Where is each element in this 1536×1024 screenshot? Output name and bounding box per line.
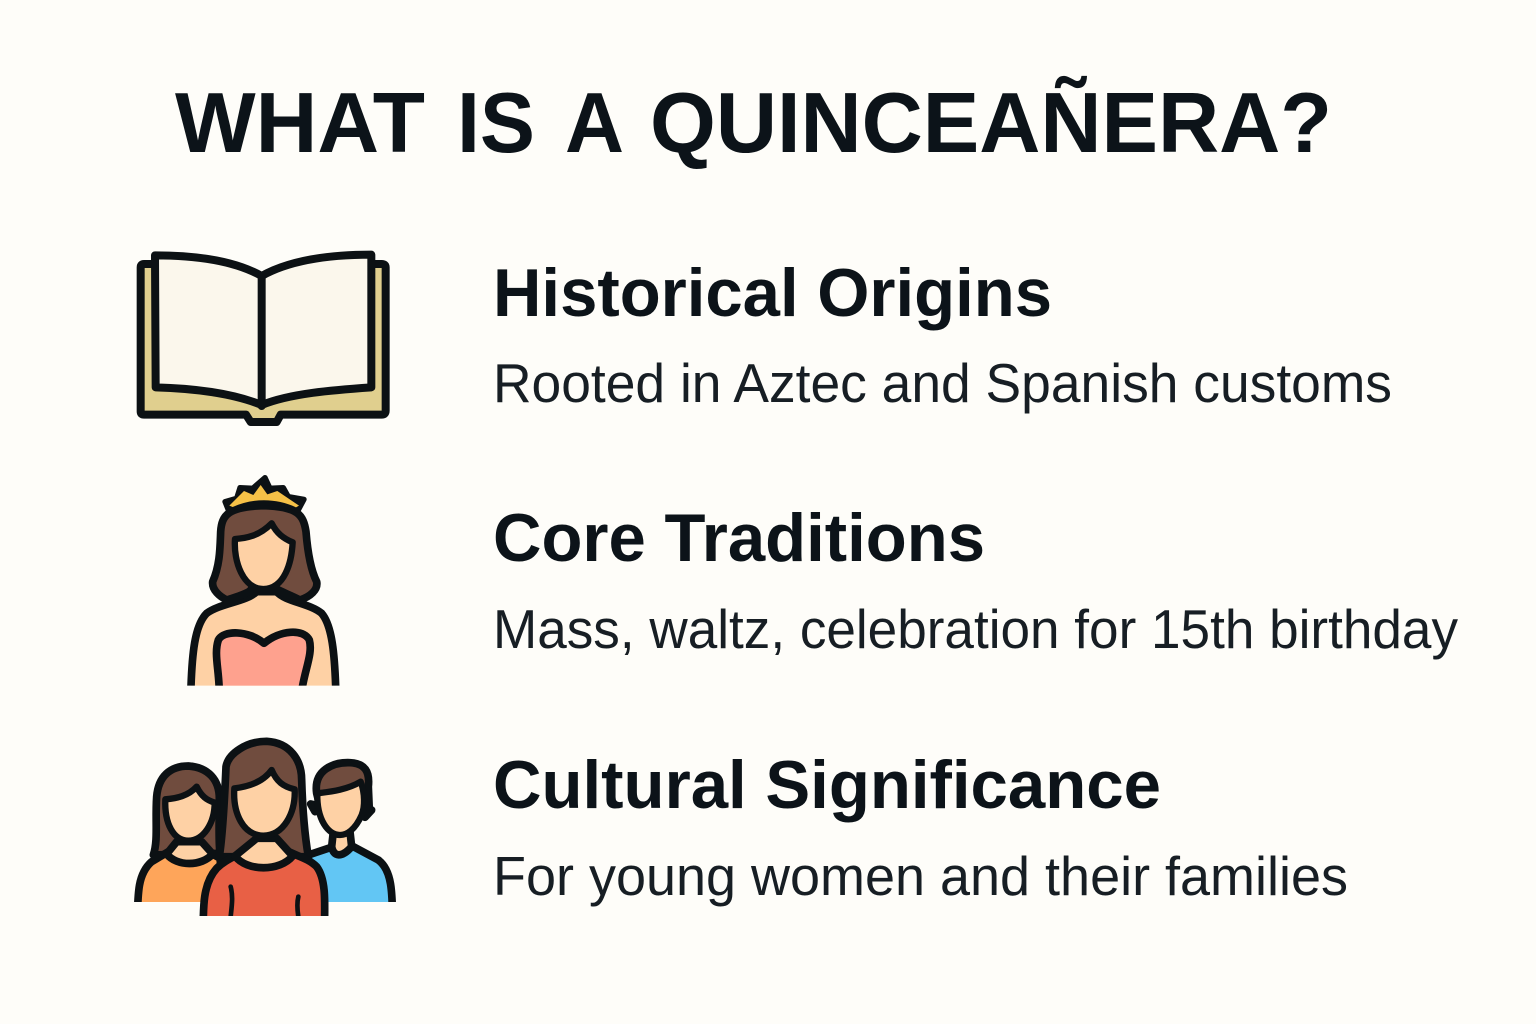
heading: core traditions: Core Traditions: [493, 500, 985, 576]
left figure: [134, 762, 222, 902]
icon: family group: [137, 741, 393, 943]
title: A: [565, 76, 623, 171]
row: historical origins: [141, 255, 1392, 422]
title: QUINCEAÑERA?: [650, 75, 1332, 171]
center figure: [203, 741, 325, 943]
title: IS: [457, 76, 535, 171]
icon: open book: [141, 255, 386, 422]
description: historical origins: Rooted in Aztec and Spanish customs: [493, 352, 1392, 414]
heading: cultural significance: Cultural Significance: [493, 747, 1161, 823]
row: cultural significance: [134, 738, 1346, 916]
row: core traditions: [191, 478, 1458, 698]
right figure: [308, 763, 393, 930]
description: cultural significance: For young women and their families: [493, 845, 1348, 907]
title: WHAT: [175, 76, 425, 171]
icon: quinceañera with crown: [191, 478, 336, 698]
description: core traditions: Mass, waltz, celebration for 15th birthday: [493, 598, 1458, 660]
heading: historical origins: Historical Origins: [493, 255, 1052, 331]
